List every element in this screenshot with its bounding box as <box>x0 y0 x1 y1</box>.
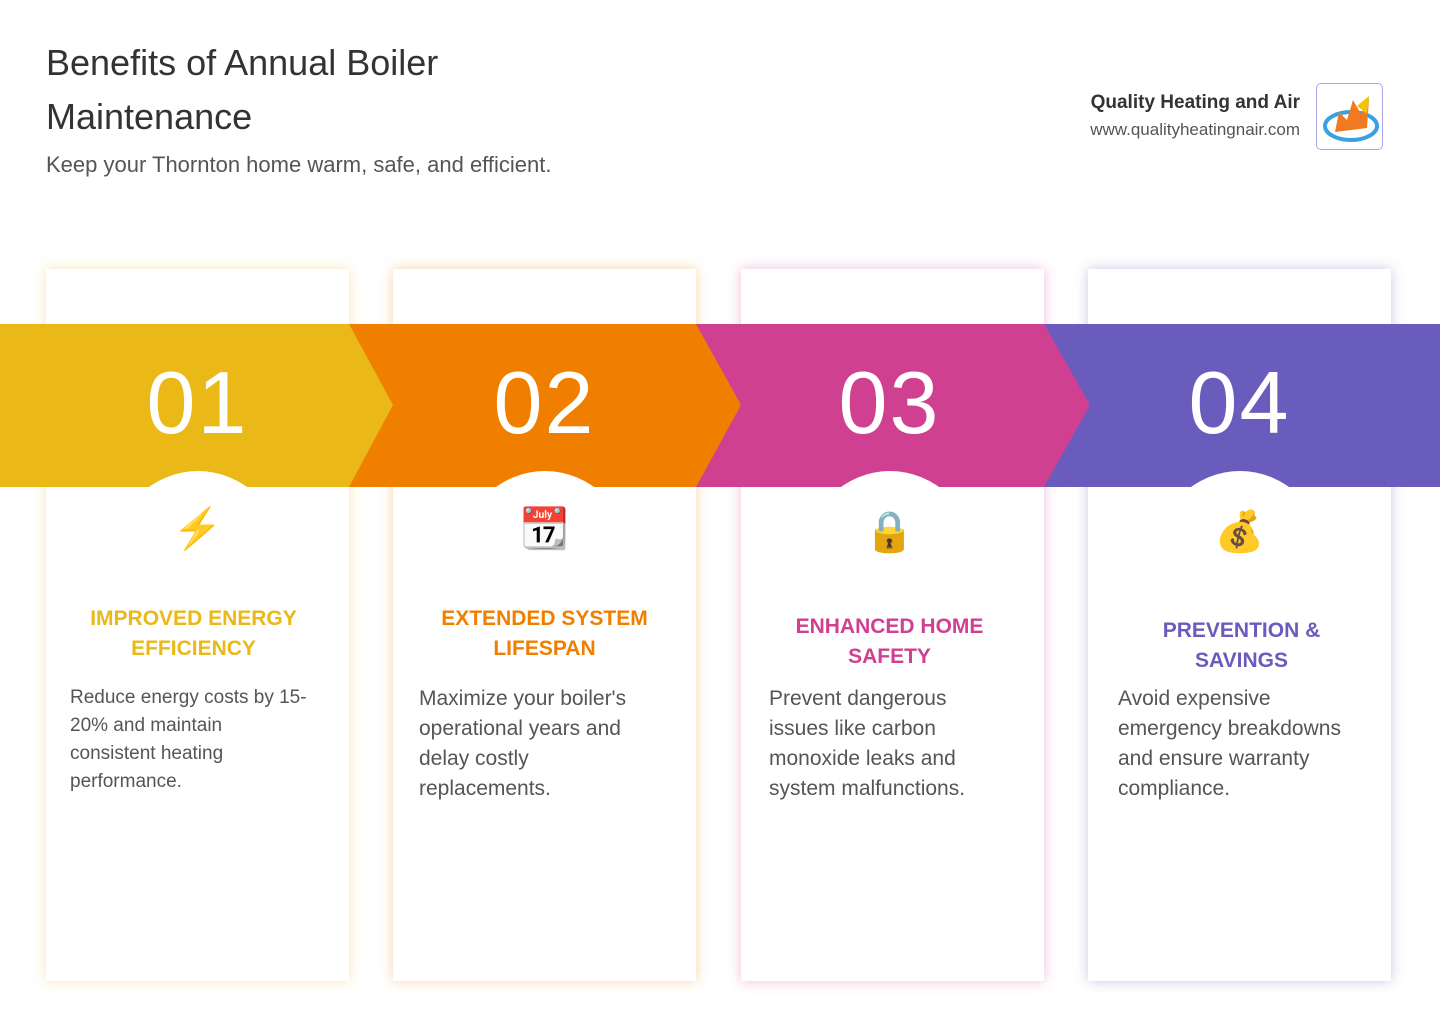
card 1 <box>46 269 349 981</box>
title 2 <box>441 607 648 660</box>
brand url: www.qualityheatingnair.com <box>1090 120 1300 139</box>
title 3: SAFETY <box>848 645 931 668</box>
body 1: Reduce energy costs by 15-20% and maintain consistent heating performance. <box>70 687 307 792</box>
title 1: IMPROVED ENERGY <box>90 607 297 630</box>
number 04: 04 <box>1189 353 1290 452</box>
body 2: Maximize your boiler's operational years and delay costly replacements. <box>419 687 626 800</box>
title 1 <box>90 607 297 660</box>
brand block <box>1090 83 1383 150</box>
number 02: 02 <box>494 353 595 452</box>
title: Benefits of Annual Boiler Maintenance <box>46 42 438 137</box>
icon: lightning: ⚡ <box>173 507 222 551</box>
title 4: SAVINGS <box>1195 649 1288 672</box>
icon: lock: 🔒 <box>865 510 914 554</box>
brand name: Quality Heating and Air <box>1091 92 1300 113</box>
title 2: EXTENDED SYSTEM <box>441 607 648 630</box>
number 03: 03 <box>839 353 940 452</box>
subtitle: Keep your Thornton home warm, safe, and efficient. <box>46 152 551 177</box>
title 4 <box>1163 619 1320 672</box>
icon: calendar: 📆 <box>520 507 569 551</box>
card 3 <box>741 269 1044 981</box>
title 4: PREVENTION & <box>1163 619 1320 642</box>
icon: logo <box>1316 83 1383 150</box>
card 2 <box>393 269 696 981</box>
body 3: Prevent dangerous issues like carbon monoxide leaks and system malfunctions. <box>769 687 965 800</box>
number 01: 01 <box>147 353 248 452</box>
arrow band <box>0 324 1440 487</box>
title 3 <box>796 615 983 668</box>
title 3: ENHANCED HOME <box>796 615 983 638</box>
body 4: Avoid expensive emergency breakdowns and ensure warranty compliance. <box>1118 687 1341 800</box>
title 2: LIFESPAN <box>493 637 596 660</box>
icon: money bag: 💰 <box>1215 510 1264 554</box>
title 1: EFFICIENCY <box>131 637 256 660</box>
card 4 <box>1088 269 1391 981</box>
